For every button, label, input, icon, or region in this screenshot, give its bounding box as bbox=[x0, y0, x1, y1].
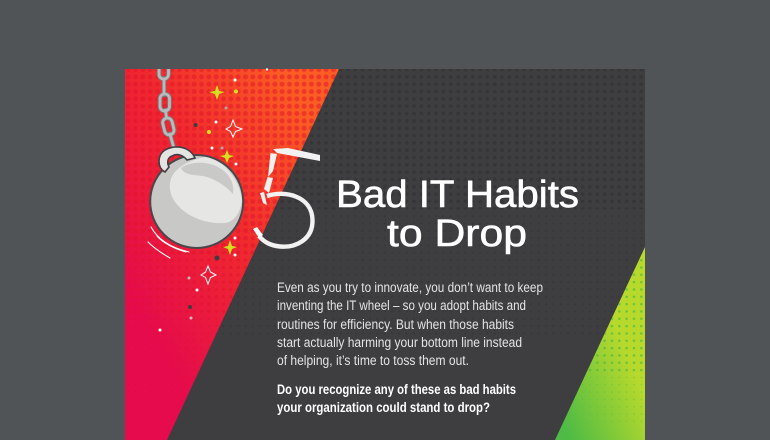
icon: lime sparkle 2 bbox=[220, 150, 234, 163]
icon: outline sparkle 1 bbox=[226, 120, 242, 137]
bold question bbox=[277, 382, 516, 415]
intro paragraph: of helping, it’s time to toss them out. bbox=[277, 353, 469, 368]
confetti dots bbox=[158, 68, 268, 332]
intro paragraph: start actually harming your bottom line instead bbox=[277, 335, 522, 350]
ball body bbox=[150, 155, 243, 248]
ball shine bbox=[181, 163, 233, 194]
icon: outline sparkle 2 bbox=[201, 266, 216, 284]
title: to Drop bbox=[387, 213, 527, 255]
intro paragraph: inventing the IT wheel – so you adopt habits and bbox=[277, 298, 526, 313]
bold question: your organization could stand to drop? bbox=[277, 400, 490, 415]
infographic canvas bbox=[125, 68, 645, 440]
numeral stem fragments bbox=[260, 153, 277, 205]
chain outline bbox=[159, 64, 175, 152]
dark panel background bbox=[125, 69, 645, 440]
motion lines bbox=[148, 227, 189, 258]
title: Bad IT Habits bbox=[336, 174, 579, 216]
intro paragraph bbox=[277, 280, 543, 368]
green gradient wedge bbox=[555, 247, 645, 440]
ball shackle bbox=[159, 147, 195, 172]
sparkles bbox=[158, 68, 268, 332]
numeral: 5 bbox=[253, 148, 320, 247]
intro paragraph: routines for efficiency. But when those habits bbox=[277, 317, 514, 332]
ball highlight bbox=[170, 157, 242, 223]
chain highlight bbox=[159, 64, 175, 152]
red gradient wedge bbox=[125, 69, 339, 440]
numeral tail bbox=[253, 227, 263, 238]
icon: lime sparkle 1 bbox=[209, 85, 225, 100]
icon: wrecking ball bbox=[150, 147, 243, 248]
icon: chain bbox=[159, 64, 175, 152]
numeral bowl bbox=[259, 194, 313, 247]
intro paragraph: Even as you try to innovate, you don’t want to keep bbox=[277, 280, 543, 295]
icon: lime sparkle 3 bbox=[223, 240, 237, 255]
title bbox=[336, 174, 579, 255]
bold question: Do you recognize any of these as bad habits bbox=[277, 382, 516, 397]
numeral top bar bbox=[273, 148, 320, 161]
